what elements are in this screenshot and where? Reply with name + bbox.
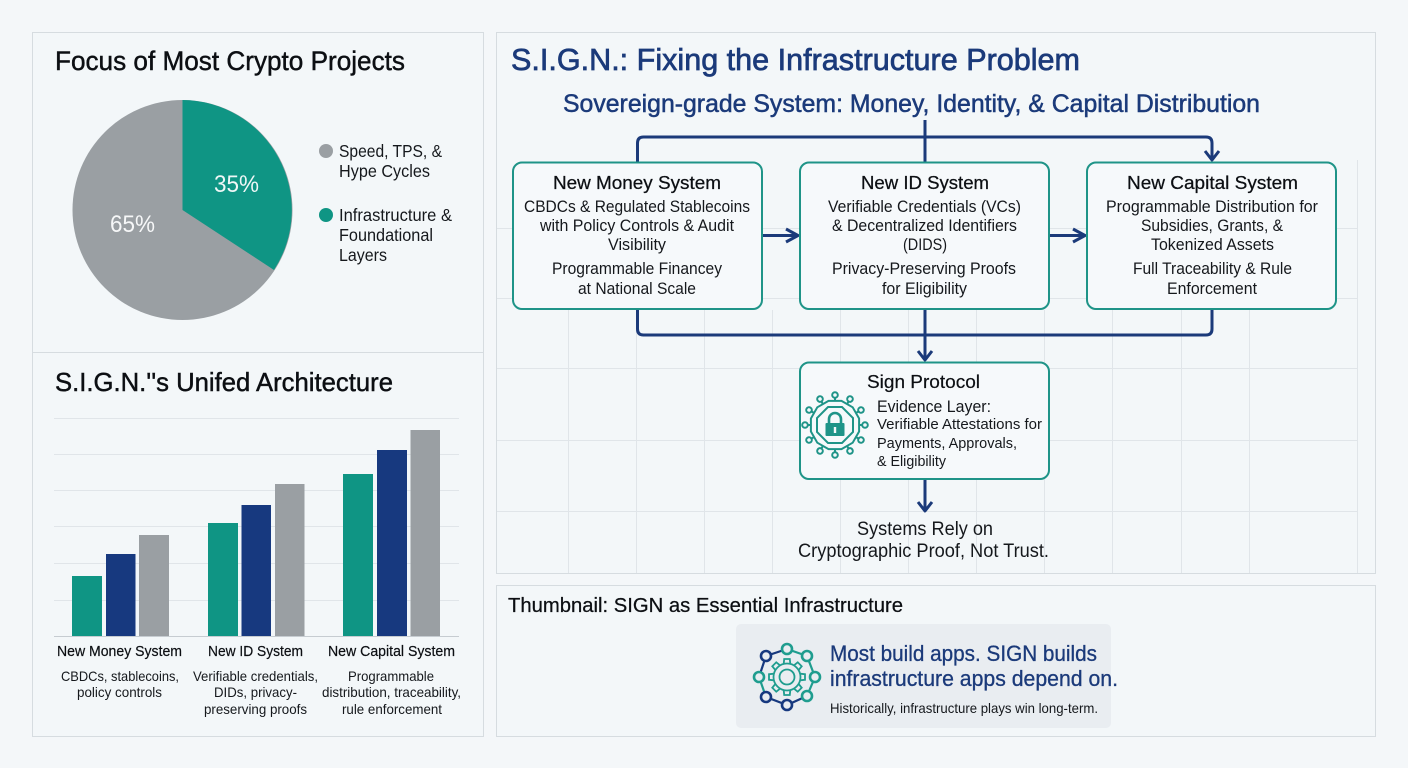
conclusion text: Systems Rely on <box>857 519 993 540</box>
pie chart: 65% <box>110 211 155 238</box>
heading: thumbnail: Thumbnail: SIGN as Essential Infrastructure <box>508 594 903 617</box>
card: new money system: Programmable Financey <box>552 260 723 278</box>
category: new money system: New Money System <box>57 643 182 660</box>
icon: gear network <box>754 644 820 710</box>
panel: focus of most crypto projects <box>32 32 484 352</box>
legend: infrastructure and foundational layers <box>319 205 452 265</box>
panel: unified architecture <box>32 352 484 736</box>
conclusion text: Cryptographic Proof, Not Trust. <box>798 541 1049 562</box>
bar chart <box>54 418 459 636</box>
card: new capital system: Programmable Distribution for <box>1106 198 1318 216</box>
arrow: sign protocol to conclusion <box>918 479 932 511</box>
legend: speed, TPS and hype cycles: Hype Cycles <box>339 161 430 181</box>
card: new id system: for Eligibility <box>882 280 968 298</box>
card: new id system: (DIDS) <box>903 236 947 254</box>
card: sign protocol <box>800 362 1049 479</box>
category: new capital system: rule enforcement <box>342 701 442 717</box>
card: new id system: & Decentralized Identifiers <box>832 217 1017 235</box>
subtitle: sovereign-grade system: Sovereign-grade System: Money, Identity, & Capital Distribution <box>563 90 1260 118</box>
card: new id system: Verifiable Credentials (VCs) <box>828 198 1021 216</box>
category: new money system: policy controls <box>77 684 162 700</box>
card: new id system: New ID System <box>861 172 989 193</box>
card: sign protocol: Payments, Approvals, <box>877 435 1017 452</box>
card: new capital system: Subsidies, Grants, & <box>1141 217 1283 235</box>
card: new money system: Visibility <box>608 236 667 254</box>
arrow: money to id <box>763 229 798 242</box>
category: new money system: CBDCs, stablecoins, <box>61 668 179 684</box>
callout: essential infrastructure: Historically, infrastructure plays win long-term. <box>830 700 1098 716</box>
card: sign protocol: & Eligibility <box>877 453 946 470</box>
legend: speed, TPS and hype cycles: Speed, TPS, & <box>339 141 442 161</box>
panel: thumbnail <box>496 586 1376 736</box>
card: new capital system: Enforcement <box>1167 280 1257 298</box>
card: new id system: Privacy-Preserving Proofs <box>832 260 1016 278</box>
heading: unified architecture: S.I.G.N.''s Unifed Architecture <box>55 367 393 397</box>
category: new id system: DIDs, privacy- <box>214 684 297 700</box>
callout: essential infrastructure: Most build apps. SIGN builds <box>830 641 1097 666</box>
callout: essential infrastructure: infrastructure apps depend on. <box>830 666 1118 691</box>
card: sign protocol: Verifiable Attestations for <box>877 416 1042 433</box>
arrow: top connector to capital system <box>638 120 1219 162</box>
card: new id system <box>800 162 1049 309</box>
arrow: id to capital <box>1050 229 1085 242</box>
category: new id system: Verifiable credentials, <box>193 668 318 684</box>
category: new money system <box>57 643 182 700</box>
heading: fixing the infrastructure problem: S.I.G.N.: Fixing the Infrastructure Problem <box>511 42 1080 77</box>
category: new id system: New ID System <box>208 643 303 660</box>
category: new id system <box>193 643 318 717</box>
conclusion text <box>798 519 1049 562</box>
card: new capital system: Tokenized Assets <box>1151 236 1274 254</box>
heading: focus of most crypto projects: Focus of Most Crypto Projects <box>55 46 405 76</box>
panel: fixing the infrastructure problem <box>496 32 1376 574</box>
card: sign protocol: Evidence Layer: <box>877 398 991 416</box>
card: new money system: New Money System <box>553 172 721 193</box>
card: new capital system <box>1087 162 1336 309</box>
legend: infrastructure and foundational layers: Infrastructure & <box>339 205 452 225</box>
category: new capital system: Programmable <box>348 668 434 684</box>
legend: speed, TPS and hype cycles <box>319 141 442 181</box>
category: new capital system: New Capital System <box>328 643 455 660</box>
arrow: bottom connector to sign protocol <box>638 309 1212 360</box>
category: new capital system: distribution, traceability, <box>322 684 461 700</box>
card: new money system <box>513 162 762 309</box>
category: new capital system <box>322 643 461 717</box>
legend: infrastructure and foundational layers: Foundational <box>339 225 433 245</box>
card: new money system: CBDCs & Regulated Stablecoins <box>524 198 750 216</box>
callout: essential infrastructure <box>736 624 1118 728</box>
pie chart <box>72 100 292 320</box>
icon: padlock in security badge <box>802 392 868 458</box>
card: new capital system: New Capital System <box>1127 172 1298 193</box>
card: new money system: at National Scale <box>578 280 696 298</box>
card: new capital system: Full Traceability & Rule <box>1133 260 1292 278</box>
card: sign protocol: Sign Protocol <box>867 372 980 392</box>
card: new money system: with Policy Controls & Audit <box>539 217 734 235</box>
pie chart: 35% <box>214 171 259 198</box>
category: new id system: preserving proofs <box>204 701 307 717</box>
legend: infrastructure and foundational layers: Layers <box>339 245 387 265</box>
